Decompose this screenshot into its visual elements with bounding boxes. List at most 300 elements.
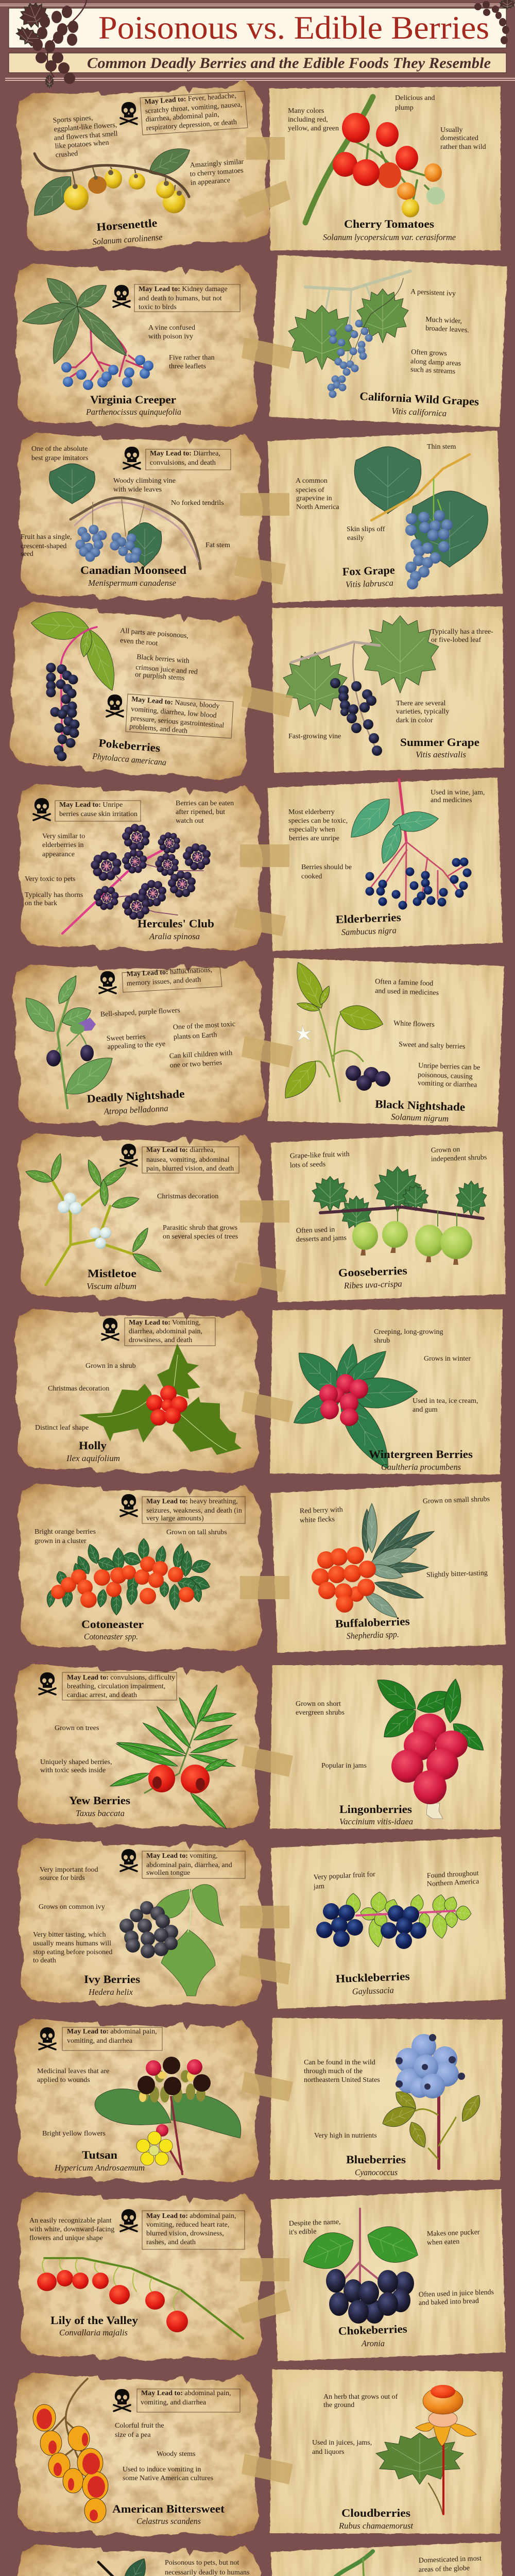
notes: Berries should be [301, 863, 352, 871]
notes [115, 2422, 213, 2482]
notes: some Native American cultures [123, 2475, 213, 2482]
panel: Chokeberries [271, 2189, 506, 2361]
notes: Grown on tall shrubs [166, 1529, 227, 1536]
notes: grown in a cluster [35, 1537, 87, 1545]
name: Vaccinium vitis-idaea [339, 1817, 413, 1826]
notes: Woody stems [157, 2450, 195, 2458]
notes [53, 114, 244, 187]
icon: skull [39, 1672, 56, 1694]
notes: Grows on common ivy [39, 1903, 105, 1911]
name: Pokeberries [98, 736, 161, 754]
notes [157, 1193, 238, 1241]
warning box: pressure, serious gastrointestinal [130, 715, 225, 730]
plant: elderberries [343, 779, 472, 910]
icon: skull [33, 798, 50, 820]
notes: Distinct leaf shape [35, 1424, 89, 1432]
name: Holly [79, 1439, 107, 1452]
tape [240, 2258, 289, 2281]
notes: dark in color [396, 717, 433, 724]
notes: Much wider, [425, 316, 462, 325]
paper [18, 432, 264, 601]
notes: crushed [55, 150, 78, 159]
notes: including red, [288, 116, 328, 124]
notes: after ripened, but [176, 808, 225, 816]
notes: three leaflets [169, 363, 206, 370]
notes: Grown on trees [55, 1724, 99, 1732]
notes: Poisonous to pets, but not [165, 2559, 239, 2567]
notes: such as streams [410, 366, 456, 376]
name [87, 1087, 185, 1116]
name: Shepherdia spp. [346, 1629, 399, 1641]
notes: jam [313, 1883, 324, 1891]
notes: white flecks [300, 1516, 335, 1524]
warning box: May Lead to: Nausea, bloody [131, 696, 220, 710]
name: Wintergreen Berries [369, 1448, 473, 1461]
notes: Fruit has a single, [21, 533, 72, 541]
name: Blueberries [346, 2153, 406, 2166]
warning box: nausea, vomiting, abdominal [146, 1156, 230, 1164]
notes: Can kill children with [169, 1049, 233, 1060]
notes: Christmas decoration [157, 1193, 218, 1200]
notes: Grown in a shrub [85, 1362, 136, 1370]
name [66, 1439, 120, 1463]
title: Poisonous vs. Edible Berries [98, 9, 489, 46]
name: Ribes uva-crispa [343, 1279, 402, 1291]
notes: to death [33, 1957, 56, 1964]
name: Cyanococcus [355, 2167, 398, 2177]
tape [234, 908, 286, 936]
tape [242, 2454, 293, 2484]
notes: Five rather than [169, 354, 215, 362]
warning box [142, 1497, 245, 1523]
plant: american bittersweet [33, 2379, 108, 2523]
notes: species can be toxic, [288, 817, 348, 825]
notes [304, 2059, 380, 2140]
notes: to cherry tomatoes [190, 167, 244, 178]
notes: like potatoes when [55, 139, 109, 150]
plant: holly [79, 1344, 242, 1455]
notes: A vine confused [148, 324, 195, 332]
panel: American Bittersweet [14, 2372, 261, 2536]
name: Rubus chamaemorust [338, 2521, 414, 2531]
notes: Very toxic to pets [25, 875, 75, 883]
notes [313, 1870, 479, 1891]
tape [242, 686, 293, 717]
name: Lingonberries [339, 1803, 412, 1816]
icon: skull [124, 447, 140, 469]
plant: yew berries [109, 1683, 238, 1832]
notes: Thin stem [427, 443, 456, 451]
notes: grapevine in [296, 495, 332, 502]
paper [11, 958, 268, 1129]
name: Menispermum canadense [88, 578, 176, 588]
plant: california wild grapes [288, 271, 410, 398]
warning box: May Lead to: convulsions, difficulty [67, 1674, 175, 1682]
panel: Jerusalem Cherries [18, 2544, 264, 2576]
warning box: cardiac arrest, and death [67, 1691, 137, 1699]
paper [272, 606, 504, 773]
tape [234, 1262, 286, 1292]
name [338, 2322, 408, 2348]
notes: Makes one pucker [427, 2228, 480, 2238]
notes: plump [395, 104, 414, 112]
notes: A persistent ivy [410, 288, 456, 298]
name: Virginia Creeper [90, 393, 176, 406]
plant: cloudberries [376, 2385, 476, 2514]
notes: it's edible [289, 2228, 317, 2236]
tape [242, 1745, 293, 1777]
name [335, 1615, 410, 1641]
paper [5, 600, 257, 782]
name [323, 217, 456, 242]
notes [296, 1700, 367, 1770]
notes: varieties, typically [396, 708, 449, 716]
warning box: May Lead to: heavy breathing, [146, 1498, 238, 1505]
name: Cotoneaster [81, 1618, 144, 1631]
name: Hercules' Club [138, 917, 214, 930]
panel: Lily of the Valley [18, 2191, 264, 2361]
notes: northeastern United States [304, 2076, 380, 2084]
notes: with wide leaves [113, 486, 162, 494]
paper [271, 2541, 506, 2576]
paper [268, 958, 504, 1127]
plant: cherry tomatoes [305, 97, 445, 223]
name [69, 1794, 130, 1818]
icon: skull [113, 285, 130, 307]
name: Yew Berries [69, 1794, 130, 1807]
tape [240, 1906, 289, 1928]
warning box: vomiting, and diarrhea [141, 2399, 207, 2406]
notes: Christmas decoration [48, 1385, 109, 1393]
plant: black nightshade [277, 958, 390, 1105]
notes: Fast-growing vine [288, 733, 341, 740]
notes: One of the most toxic [173, 1021, 235, 1031]
notes: Creeping, long-growing [374, 1328, 443, 1336]
name [338, 2506, 414, 2531]
warning box: May Lead to: abdominal pain, [141, 2389, 231, 2397]
notes: cooked [301, 873, 322, 880]
notes: applied to wounds [37, 2076, 90, 2084]
notes: areas of the globe [419, 2565, 470, 2574]
notes [410, 288, 469, 376]
notes: Very similar to [42, 833, 85, 840]
notes [165, 2559, 249, 2576]
paper [14, 1663, 261, 1828]
warning box [142, 1851, 245, 1878]
notes: Grown on [431, 1146, 460, 1155]
plant: summer grape [283, 616, 439, 756]
panel: California Wild Grapes [269, 255, 507, 427]
name: Atropa belladonna [103, 1103, 168, 1116]
panel: Huckleberries [271, 1837, 506, 2009]
panel: Horsenettle [14, 76, 274, 258]
notes: Colorful fruit the [115, 2422, 164, 2430]
plant: lingonberries [371, 1671, 489, 1819]
paper [269, 87, 501, 250]
notes: Sports spines, [53, 114, 93, 125]
warning box: vomiting, and diarrhea [67, 2037, 133, 2045]
notes: with white, downward-facing [29, 2226, 114, 2233]
icon: header vine left [12, 0, 87, 88]
warning box: pain, blurred vision, and death [146, 1165, 234, 1173]
panel: Deadly Nightshade [11, 958, 268, 1129]
icon: header grapes right [474, 0, 515, 44]
notes [120, 627, 198, 683]
warning box: May Lead to: Unripe [59, 801, 123, 809]
notes: shrub [374, 1337, 390, 1345]
warning box: vomiting, reduced heart rate, [146, 2221, 229, 2229]
panel: Ivy Berries [18, 1837, 264, 2007]
notes: one or two berries [169, 1059, 222, 1070]
name: Horsenettle [96, 216, 158, 233]
name: Summer Grape [400, 736, 479, 749]
paper [270, 2369, 503, 2534]
name [335, 1970, 410, 1996]
icon: skull [39, 2027, 56, 2049]
notes: Berries can be eaten [176, 800, 234, 807]
warning box: May Lead to: Diarrhea, [150, 450, 220, 457]
notes [419, 2555, 493, 2576]
name: Deadly Nightshade [87, 1087, 185, 1105]
notes: along damp areas [410, 358, 461, 368]
notes: Often used in juice blends [419, 2289, 494, 2299]
name [80, 564, 186, 588]
notes: Grown on short [296, 1700, 341, 1708]
name: Hedera helix [88, 1987, 133, 1997]
notes [290, 1146, 487, 1244]
name [359, 389, 479, 418]
notes: appearance [42, 851, 75, 858]
paper [18, 783, 264, 951]
paper [271, 1482, 506, 1653]
notes: Amazingly similar [190, 158, 244, 170]
notes: Northern America [426, 1878, 479, 1888]
notes [37, 2067, 109, 2138]
notes: lots of seeds [290, 1161, 325, 1170]
plant: gooseberries [312, 1166, 487, 1265]
warning box [62, 2027, 162, 2050]
panel: Mistletoe [18, 1132, 264, 1301]
icon: skull [121, 1849, 137, 1871]
panel: Wintergreen Berries [270, 1309, 503, 1476]
name [342, 563, 395, 589]
notes: Parasitic shrub that grows [163, 1224, 237, 1232]
notes [288, 94, 486, 151]
name: Chokeberries [338, 2322, 408, 2337]
name: Sambucus nigra [341, 925, 397, 937]
name: Lily of the Valley [50, 2314, 138, 2327]
name [87, 1267, 136, 1291]
plant: virginia creeper [20, 272, 153, 390]
warning box [55, 801, 141, 821]
notes [29, 2217, 114, 2242]
icon: skull [107, 694, 123, 717]
tape [242, 1036, 293, 1067]
plant: lily of the valley [37, 2258, 243, 2338]
notes: in appearance [190, 177, 230, 187]
notes: Bright yellow flowers [42, 2130, 106, 2138]
notes: Unripe berries can be [418, 1062, 480, 1072]
warning box: toxic to birds [139, 303, 177, 311]
name: Vitis californica [391, 406, 447, 418]
subtitle band [9, 53, 506, 73]
warning box: May Lead to: Fever, headache, [144, 92, 236, 106]
notes: Bright orange berries [35, 1528, 96, 1536]
name: Fox Grape [342, 563, 395, 578]
warning box: diarrhea, abdominal pain, [145, 111, 219, 124]
notes: especially when [289, 826, 335, 834]
notes: and baked into bread [419, 2297, 479, 2307]
name [54, 2148, 145, 2173]
name: Viscum album [87, 1281, 136, 1291]
name [338, 1264, 408, 1291]
notes [148, 324, 215, 370]
name [369, 1448, 473, 1472]
notes: Slightly bitter-tasting [426, 1569, 488, 1579]
notes: Used to induce vomiting in [123, 2466, 201, 2473]
plant: tutsan [95, 2057, 241, 2174]
icon: skull [121, 2209, 137, 2231]
notes: elderberries in [42, 841, 83, 849]
panel: Lingonberries [270, 1665, 503, 1829]
warning box: diarrhea, abdominal pain, [129, 1328, 202, 1335]
warning box [146, 449, 231, 470]
plant: huckleberries [316, 1891, 472, 1949]
plant: deadly nightshade [19, 973, 120, 1108]
name: California Wild Grapes [359, 389, 479, 408]
paper [18, 1483, 264, 1652]
name: Tutsan [82, 2148, 117, 2161]
name [346, 2153, 406, 2177]
notes: or five-lobed leaf [431, 636, 482, 644]
warning box [126, 694, 233, 738]
icon: skull [121, 102, 137, 124]
notes: and used in medicines [375, 987, 439, 997]
notes: All parts are poisonous, [120, 627, 188, 640]
warning box: blurred vision, drowsiness, [146, 2230, 224, 2238]
name: Parthenocissus quinquefolia [85, 407, 181, 417]
notes [33, 1866, 112, 1964]
name [375, 1097, 466, 1124]
warning box [125, 1318, 215, 1346]
paper [270, 1665, 503, 1829]
notes [300, 1495, 490, 1579]
warning box: May Lead to: vomiting, [146, 1852, 217, 1860]
notes: on the bark [25, 900, 57, 907]
tape [238, 2289, 290, 2324]
notes [25, 800, 234, 907]
notes: with toxic seeds inside [40, 1767, 106, 1774]
notes: Often used in [296, 1226, 335, 1235]
name [81, 1618, 144, 1641]
warning box: May Lead to: Kidney damage [139, 285, 228, 293]
panel: Blueberries [270, 2018, 503, 2180]
notes: vomiting or diarrhea [418, 1079, 477, 1089]
notes: Grape-like fruit with [290, 1150, 350, 1160]
notes: Used in tea, ice cream, [413, 1397, 478, 1405]
name: Hypericum Androsaemum [54, 2163, 145, 2173]
paper [18, 1132, 264, 1301]
plant: jerusalem cherries [88, 2554, 246, 2576]
name: Cherry Tomatoes [344, 217, 434, 230]
notes: and flowers that smell [54, 130, 118, 142]
warning box: May Lead to: hallucinations, [126, 966, 212, 978]
paper [271, 2189, 506, 2361]
icon: skull [102, 1318, 118, 1340]
name: Ilex aquifolium [66, 1453, 120, 1463]
notes: usually means humans will [33, 1940, 111, 1947]
paper [14, 2018, 261, 2182]
name: Mistletoe [88, 1267, 136, 1280]
tape [242, 2072, 293, 2102]
plant: pokeberries [30, 609, 123, 761]
notes: There are several [396, 700, 445, 707]
panel: Cloudberries [270, 2369, 503, 2534]
name: Elderberries [335, 911, 402, 926]
notes: Very important food [40, 1866, 98, 1874]
paper [18, 2191, 264, 2361]
notes: berries are unripe [289, 835, 339, 842]
name [400, 736, 479, 759]
paper [18, 1837, 264, 2007]
tape [242, 337, 293, 369]
notes: and liquors [312, 2448, 345, 2456]
name [339, 1803, 413, 1826]
name: Aralia spinosa [149, 931, 200, 941]
notes: Typically has thorns [25, 891, 83, 899]
notes: Bell-shaped, purple flowers [100, 1007, 180, 1019]
notes [296, 443, 456, 542]
notes: through much of the [304, 2067, 363, 2075]
name: Solanum nigrum [391, 1112, 449, 1124]
warning box: convulsions, and death [150, 459, 216, 467]
notes: Uniquely shaped berries, [40, 1758, 112, 1766]
notes: when eaten [427, 2238, 459, 2247]
notes: Delicious and [395, 94, 435, 102]
notes: Usually [440, 126, 463, 134]
icon: skull [114, 2389, 130, 2411]
notes: crescent-shaped [21, 543, 66, 550]
notes: Grows in winter [424, 1355, 471, 1363]
notes: Skin slips off [347, 526, 385, 533]
notes [40, 1724, 112, 1774]
notes: stop eating before poisoned [33, 1948, 112, 1956]
warning box: respiratory depression, or death [146, 118, 237, 132]
name [85, 393, 181, 417]
name [112, 2502, 225, 2526]
warning box: swollen tongue [146, 1869, 190, 1877]
name [92, 216, 163, 247]
notes: North America [296, 503, 339, 511]
paper [18, 2544, 264, 2576]
notes [375, 978, 480, 1089]
plant: canadian moonseed [49, 464, 200, 569]
notes: An easily recognizable plant [29, 2217, 112, 2225]
plant: blueberries [379, 2034, 485, 2168]
notes: broader leaves. [425, 325, 469, 334]
notes: eggplant-like flowers, [54, 121, 117, 133]
notes: domesticated [440, 134, 478, 142]
panel: Cotoneaster [18, 1483, 264, 1652]
paper [270, 1309, 503, 1475]
warning box: abdominal pain, diarrhea, and [146, 1861, 232, 1869]
panel: Summer Grape [272, 606, 504, 773]
warning box: May Lead to: diarrhea, [146, 1146, 215, 1154]
notes [288, 628, 493, 740]
panel: Hercules' Club [18, 783, 264, 951]
panel: Virginia Creeper [14, 263, 259, 427]
warning box: May Lead to: abdominal pain, [146, 2212, 236, 2220]
